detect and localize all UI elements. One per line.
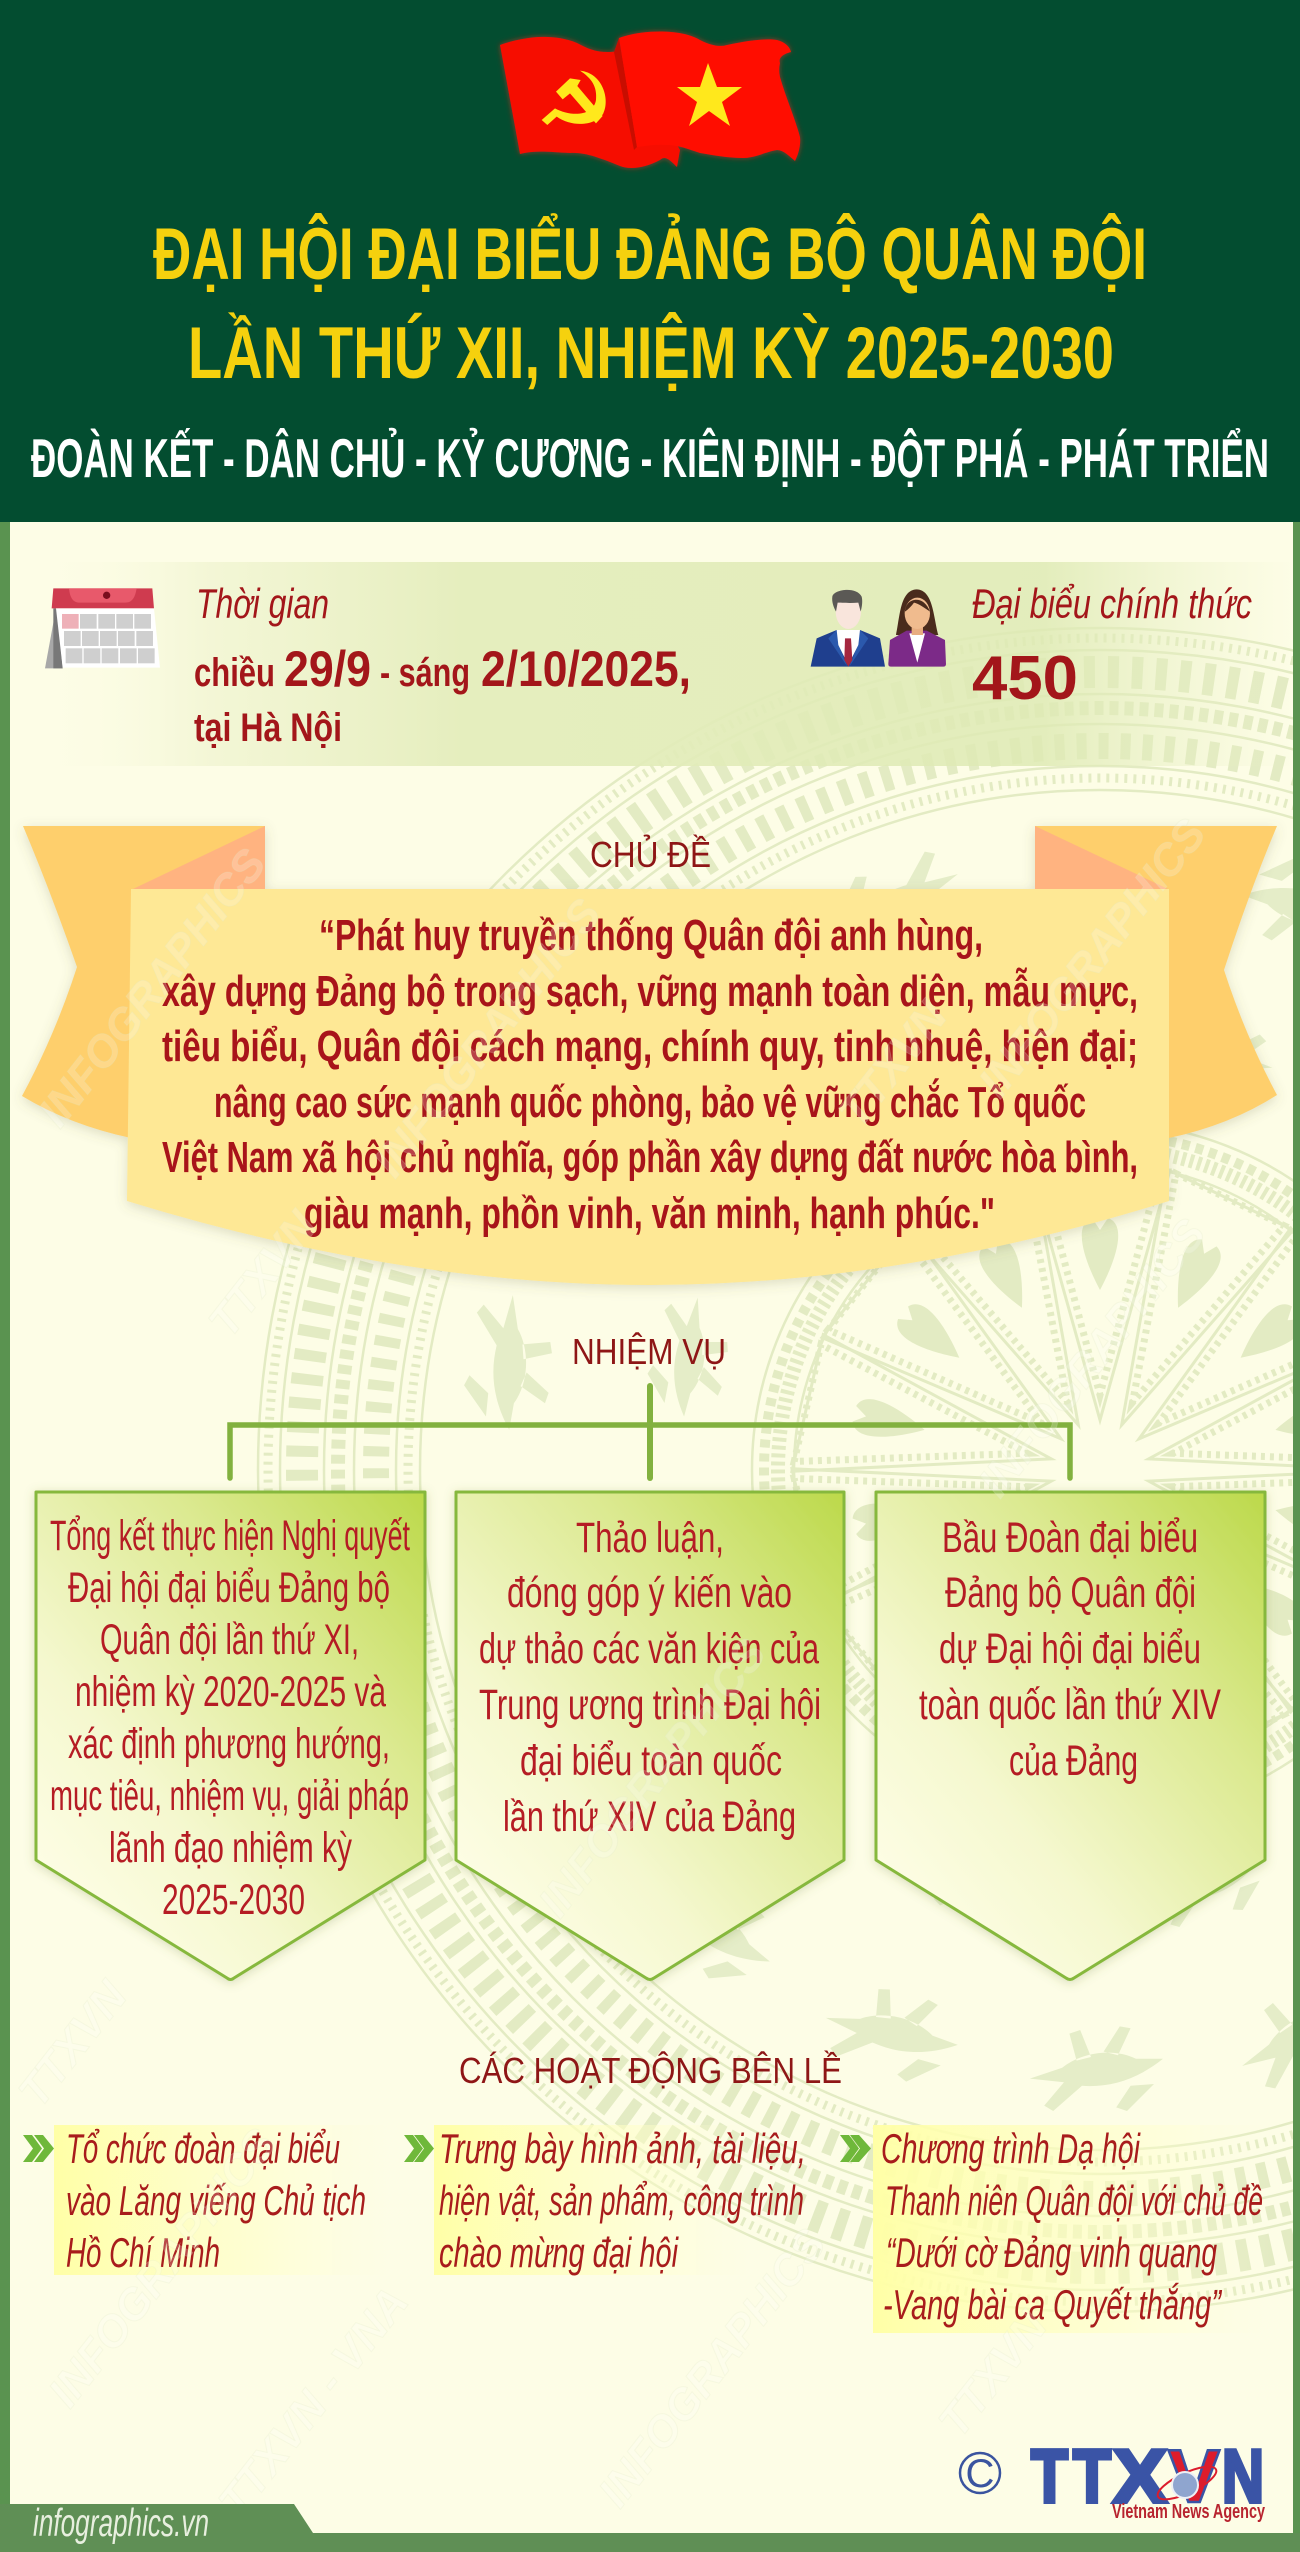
watermarks: TTXVN: [9, 1971, 137, 2116]
watermarks: INFOGRAPHICS: [529, 1630, 776, 1926]
text: task 1: 2025-2030: [162, 1876, 305, 1924]
watermarks: [9, 810, 1216, 2526]
text: task 3: dự Đại hội đại biểu: [939, 1625, 1201, 1673]
title: [153, 214, 1147, 394]
text: activity 2: Trưng bày hình ảnh, tài liệu,: [439, 2125, 806, 2172]
text: task 3: Đảng bộ Quân đội: [945, 1569, 1196, 1617]
watermarks: TTXVN: [199, 1201, 327, 1346]
text: time: 2/10/2025,: [481, 641, 691, 697]
connector: tree lines: [230, 1386, 1070, 1478]
ribbon tail: right: [1035, 826, 1277, 1138]
text: activity 1: Tổ chức đoàn đại biểu: [66, 2125, 340, 2172]
watermarks: TTXVN: [929, 2301, 1057, 2446]
text: theme quote: giàu mạnh, phồn vinh, văn minh, hạnh phúc.": [304, 1189, 995, 1238]
watermarks: INFOGRAPHICS: [39, 2120, 286, 2416]
watermarks: INFOGRAPHICS: [969, 810, 1216, 1106]
icon: chevrons: [23, 2135, 54, 2162]
panel: task 2: [456, 1492, 844, 1980]
text: time: Thời gian: [196, 580, 329, 627]
text: activity 3: Chương trình Dạ hội: [881, 2125, 1141, 2172]
text: task 1: Tổng kết thực hiện Nghị quyết: [50, 1512, 410, 1560]
icon: delegates: [811, 589, 946, 667]
heading: tasks: NHIỆM VỤ: [572, 1331, 726, 1372]
text: activity 3: [881, 2125, 1263, 2328]
panel: time and delegates strip: [30, 562, 1295, 766]
text: task 2: lần thứ XIV của Đảng: [503, 1793, 796, 1841]
logo: TTXVN: [1031, 2434, 1264, 2518]
panel: task 3: [876, 1492, 1265, 1980]
watermarks: TTXVN - VNA: [209, 2278, 418, 2526]
text: activity 2: chào mừng đại hội: [439, 2229, 679, 2276]
heading: theme: CHỦ ĐỀ: [590, 833, 711, 875]
text: task 1: lãnh đạo nhiệm kỳ: [109, 1824, 352, 1872]
icon: globe with orbit: [1154, 2460, 1220, 2506]
ribbon body: [127, 889, 1169, 1285]
logo: TTXVN: T: [1073, 2434, 1111, 2518]
text: activity 2: [439, 2125, 806, 2276]
icon: chevrons: [840, 2135, 871, 2162]
activity 1: [23, 2125, 394, 2276]
text: website: infographics.vn: [33, 2502, 209, 2545]
text: theme quote: [162, 911, 1138, 1238]
text: task 2: đại biểu toàn quốc: [520, 1737, 782, 1785]
logo: TTXVN: X: [1113, 2434, 1167, 2518]
watermarks: INFOGRAPHICS: [969, 1210, 1216, 1506]
panel: body background: [10, 522, 1293, 2533]
text: time: 29/9: [284, 641, 371, 697]
text: task 1: [50, 1512, 410, 1924]
text: task 2: đóng góp ý kiến vào: [507, 1569, 792, 1617]
text: activity 2: hiện vật, sản phẩm, công trình: [439, 2177, 804, 2224]
text: activity 1: Hồ Chí Minh: [66, 2229, 220, 2276]
activity 2: [404, 2125, 806, 2276]
logo: TTXVN: V: [1168, 2434, 1220, 2518]
watermarks: INFOGRAPHICS: [364, 890, 611, 1186]
text: time: - sáng: [380, 651, 470, 695]
text: time: chiều: [194, 651, 275, 695]
activity 3: [840, 2125, 1273, 2333]
text: delegates: 450: [972, 644, 1078, 713]
background: bronze drum pattern: [258, 628, 1300, 2312]
logo: TTXVN: N: [1222, 2434, 1264, 2518]
watermarks: INFOGRAPHICS: [589, 2220, 836, 2516]
text: task 2: Thảo luận,: [576, 1514, 724, 1562]
text: task 3: của Đảng: [1009, 1737, 1138, 1785]
text: task 1: Đại hội đại biểu Đảng bộ: [68, 1564, 390, 1612]
text: task 2: [479, 1514, 821, 1841]
text: task 1: xác định phương hướng,: [68, 1720, 390, 1768]
text: task 1: nhiệm kỳ 2020-2025 và: [75, 1668, 386, 1716]
text: task 2: dự thảo các văn kiện của: [479, 1625, 819, 1673]
heading: side activities: CÁC HOẠT ĐỘNG BÊN LỀ: [459, 2050, 842, 2091]
ribbon fold: right: [1035, 826, 1168, 889]
text: task 3: [919, 1514, 1221, 1785]
text: task 2: Trung ương trình Đại hội: [479, 1681, 821, 1729]
copyright symbol: C: [966, 2452, 994, 2496]
text: task 3: Bầu Đoàn đại biểu: [942, 1514, 1198, 1562]
text: theme quote: “Phát huy truyền thống Quân đội anh hùng,: [319, 911, 983, 960]
ribbon tail: left: [22, 826, 265, 1138]
text: activity 1: [66, 2125, 366, 2276]
icon: chevrons: [404, 2135, 434, 2162]
text: delegates: [972, 580, 1252, 713]
icon: calendar: [45, 588, 160, 668]
logo: TTXVN: T: [1031, 2434, 1068, 2518]
header band: [0, 0, 1300, 522]
text: task 1: mục tiêu, nhiệm vụ, giải pháp: [50, 1772, 409, 1820]
text: task 1: Quân đội lần thứ XI,: [100, 1616, 359, 1664]
watermarks: INFOGRAPHICS: [29, 840, 276, 1136]
ribbon fold: left: [133, 826, 265, 889]
ribbon banner: [22, 826, 1277, 1285]
watermarks: TTXVN: [829, 991, 957, 1136]
text: time: tại Hà Nội: [194, 706, 342, 750]
icon: hammer and sickle: [542, 71, 606, 125]
text: activity 1: vào Lăng viếng Chủ tịch: [66, 2177, 366, 2224]
icon: party and national flags: [500, 32, 800, 168]
text: time: [194, 580, 691, 750]
icon: gold star: [677, 63, 742, 126]
panel: task 1: [36, 1492, 425, 1980]
footer tab: [0, 2504, 1300, 2552]
